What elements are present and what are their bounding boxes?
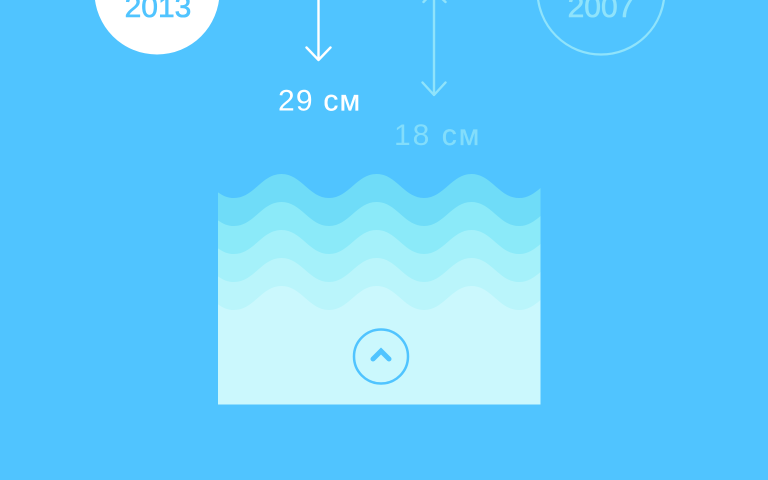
wave layer 1 bbox=[218, 174, 540, 226]
arrow: 2007 bbox=[422, 0, 446, 95]
wave layer 2 bbox=[218, 202, 540, 254]
arrow: 2013 bbox=[306, 0, 330, 60]
badge: 2013 bbox=[94, 0, 220, 54]
badge: 2007 bbox=[538, 0, 664, 54]
label: 18 cm: 18 см bbox=[394, 119, 481, 152]
wave layer 3 bbox=[218, 230, 540, 282]
water waves bbox=[218, 174, 540, 404]
wave layer 5 bbox=[218, 286, 540, 404]
icon: chevron up in circle bbox=[354, 330, 408, 384]
label: 29 cm: 29 см bbox=[278, 84, 361, 118]
wave layer 4 bbox=[218, 258, 540, 310]
